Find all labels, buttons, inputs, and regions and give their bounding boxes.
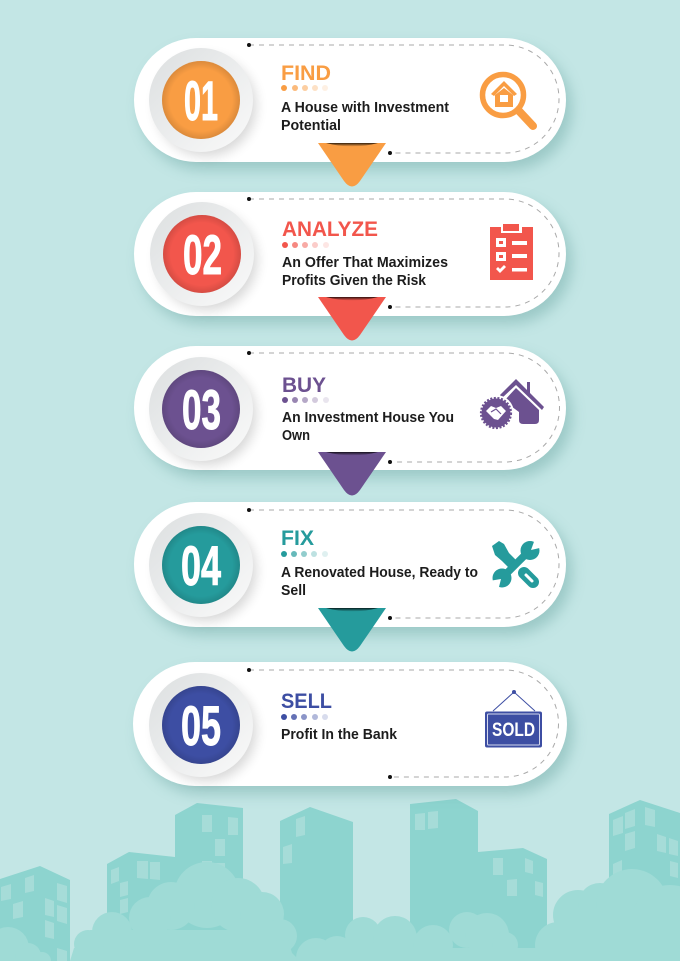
card panel	[134, 38, 566, 162]
card panel	[134, 192, 566, 316]
icon: magnifier with house	[482, 74, 533, 126]
description: A House with Investment	[281, 100, 449, 116]
number badge	[150, 202, 257, 310]
progress dots	[282, 242, 329, 248]
card shadow	[140, 354, 572, 478]
description	[282, 410, 454, 444]
description: A Renovated House, Ready to	[281, 565, 478, 581]
icon: house and handshake badge	[478, 379, 544, 431]
buildings	[0, 799, 680, 961]
heading: SELL	[281, 690, 332, 713]
number badge	[149, 357, 256, 465]
connector dots	[247, 351, 392, 464]
dashed outline	[249, 45, 559, 153]
description	[281, 100, 449, 134]
description: Potential	[281, 118, 341, 134]
number badge	[149, 673, 256, 781]
icon: wrench and screwdriver	[489, 539, 544, 591]
progress dots	[282, 397, 329, 403]
dashed outline	[249, 670, 558, 777]
step 4: fix	[134, 502, 572, 652]
number badge: 05	[181, 694, 221, 757]
connector dots	[247, 43, 392, 155]
description: An Investment House You	[282, 410, 454, 426]
number badge	[149, 48, 256, 156]
building windows	[1, 807, 678, 961]
connector dots	[247, 197, 392, 309]
card shadow	[140, 510, 572, 635]
arrow	[318, 608, 386, 652]
progress dots	[281, 551, 328, 557]
icon: sold sign: SOLD	[492, 720, 535, 741]
arrow	[318, 297, 386, 340]
card shadow	[140, 200, 572, 324]
description: Sell	[281, 583, 306, 599]
arrow	[318, 143, 386, 186]
clouds	[0, 862, 680, 961]
progress dots	[281, 85, 328, 91]
icon: clipboard	[490, 224, 533, 280]
card shadow	[139, 670, 573, 794]
description: Profits Given the Risk	[282, 273, 427, 289]
number badge	[149, 513, 256, 621]
heading: FIX	[281, 527, 314, 550]
connector dots	[247, 508, 392, 620]
description: Profit In the Bank	[281, 727, 398, 743]
step 2: analyze	[134, 192, 572, 340]
card shadow	[140, 46, 572, 170]
card panel	[134, 346, 566, 470]
description: An Offer That Maximizes	[282, 255, 448, 271]
icon: sold sign	[485, 690, 542, 748]
number badge: 01	[184, 69, 218, 132]
heading: ANALYZE	[282, 218, 378, 241]
city skyline	[0, 799, 680, 961]
connector dots	[247, 668, 392, 779]
progress dots	[281, 714, 328, 720]
dashed outline	[249, 353, 560, 462]
step 5: sell	[133, 662, 573, 794]
step 1: find	[134, 38, 572, 186]
card panel	[133, 662, 567, 786]
arrow	[318, 452, 386, 496]
card panel	[134, 502, 566, 627]
step 3: buy	[134, 346, 572, 496]
heading: BUY	[282, 374, 326, 397]
number badge: 03	[182, 378, 221, 441]
heading: FIND	[281, 62, 331, 85]
dashed outline	[249, 199, 559, 307]
number badge: 02	[183, 223, 222, 286]
number badge: 04	[181, 534, 221, 597]
description	[281, 565, 478, 599]
description	[282, 255, 448, 289]
description: Own	[282, 428, 310, 444]
dashed outline	[249, 510, 559, 618]
